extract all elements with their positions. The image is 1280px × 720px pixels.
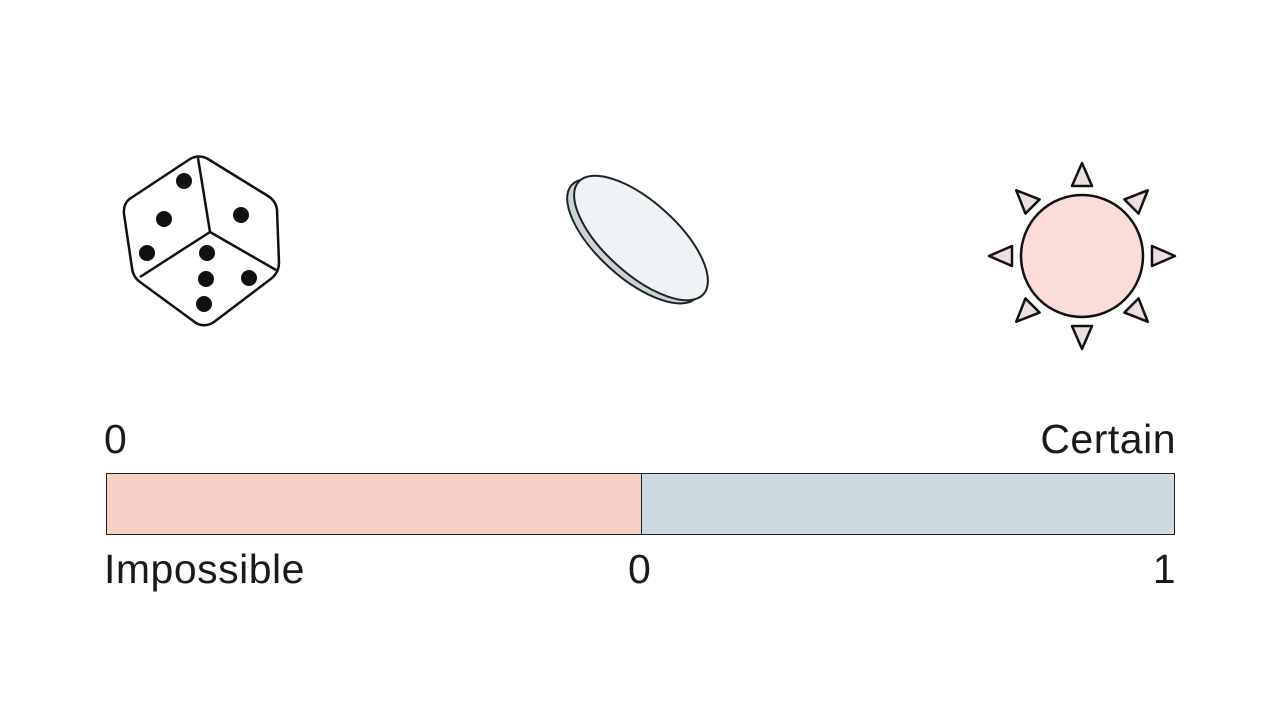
icon: coin: [566, 174, 709, 304]
icon: dice: [122, 155, 280, 326]
label: 1: 1: [1153, 546, 1176, 592]
label: Certain: Certain: [1040, 416, 1176, 462]
probability bar: [106, 473, 1175, 535]
label: 0 middle: 0: [628, 546, 651, 592]
label: Impossible: Impossible: [104, 546, 305, 592]
label: 0 top: 0: [104, 416, 127, 462]
icon: sun: [988, 162, 1176, 350]
